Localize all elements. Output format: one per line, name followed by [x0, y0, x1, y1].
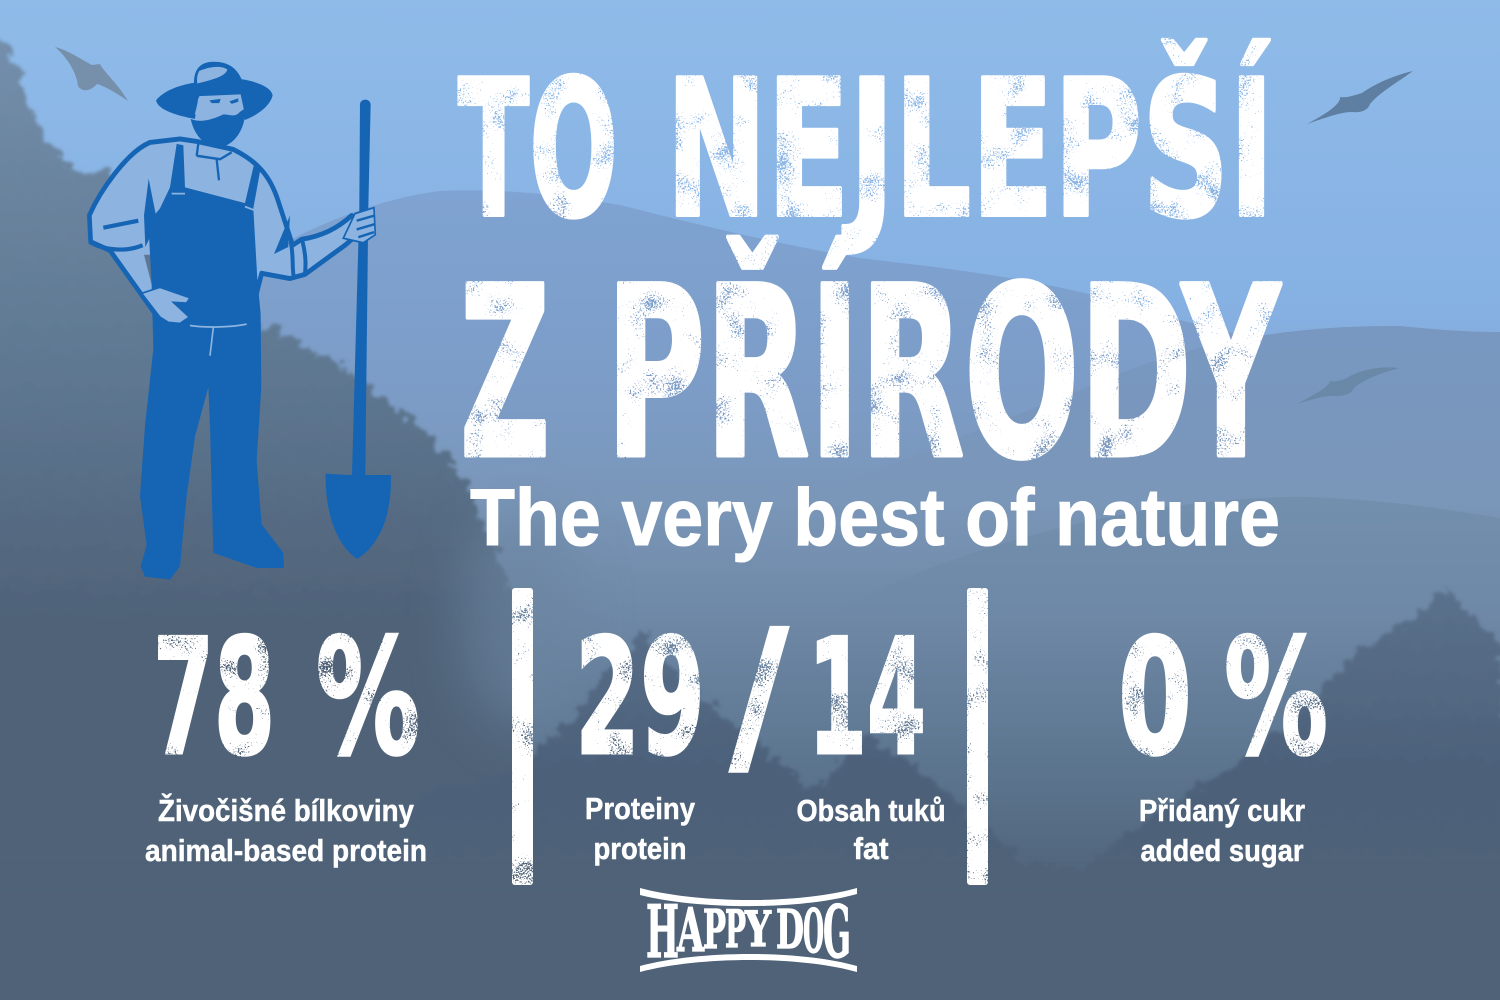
stat: 29 / 14 protein and fat: 29	[575, 604, 705, 791]
stat: 78 % animal-based protein: 78	[153, 604, 275, 791]
logo: Happy Dog: H	[646, 889, 679, 974]
logo: Happy Dog: P	[725, 900, 746, 960]
gap between arm and body	[144, 255, 155, 296]
title: Czech: Z	[460, 238, 550, 511]
stat: 29 / 14 protein and fat: fat	[854, 831, 888, 866]
title: Czech	[458, 39, 1282, 511]
right hand	[343, 208, 375, 243]
stat: 29 / 14 protein and fat: 14	[808, 604, 926, 791]
stat: 0 % added sugar: %	[1224, 604, 1328, 791]
stat: 0 % added sugar: added sugar	[1140, 833, 1304, 868]
stat: 29 / 14 protein and fat: protein	[594, 831, 686, 866]
divider right	[967, 588, 988, 885]
stat: 0 % added sugar: Přidaný cukr	[1139, 793, 1305, 828]
stat: 29 / 14 protein and fat: Obsah tuků	[796, 793, 946, 828]
bird: top left	[55, 47, 128, 101]
logo: Happy Dog: O	[803, 897, 824, 967]
hat	[156, 62, 273, 120]
sleeve cuffs	[89, 221, 306, 278]
bird: right middle	[1297, 367, 1400, 404]
left forest	[0, 15, 530, 1000]
logo: Happy Dog: D	[776, 899, 804, 961]
overalls and trousers	[140, 144, 284, 580]
stat: 29 / 14 protein and fat	[575, 594, 946, 866]
farmer with shovel	[89, 62, 391, 580]
logo: Happy Dog: G	[823, 889, 851, 974]
shovel blade	[326, 474, 391, 559]
stat: 29 / 14 protein and fat: /	[730, 594, 788, 797]
subtitle: English: The very best of nature	[470, 473, 1280, 563]
stat: 78 % animal-based protein: Živočišné bílkoviny	[158, 792, 415, 828]
stat: 0 % added sugar: 0	[1118, 604, 1192, 791]
face and beard	[195, 94, 244, 128]
logo: Happy Dog: A	[676, 896, 705, 966]
waist and strap highlights	[172, 194, 255, 356]
title: Czech: TO	[458, 40, 618, 260]
stat: 78 % animal-based protein	[145, 604, 427, 868]
sleeve shading	[144, 179, 290, 254]
logo: Happy Dog: Y	[744, 900, 772, 958]
stat: 29 / 14 protein and fat: Proteiny	[585, 791, 696, 826]
left hand	[142, 287, 190, 323]
divider left	[512, 588, 533, 885]
foreground tree lines	[300, 590, 1500, 1000]
logo: Happy Dog	[640, 888, 857, 974]
haze over forest edge	[460, 510, 580, 730]
shirt and arms	[89, 139, 363, 321]
bird: top right	[1307, 71, 1413, 124]
stat: 78 % animal-based protein: %	[316, 604, 420, 791]
shovel handle	[352, 100, 371, 475]
stat: 78 % animal-based protein: animal-based protein	[145, 833, 427, 868]
logo: Happy Dog: P	[703, 899, 726, 961]
stat: 0 % added sugar	[1118, 604, 1328, 868]
